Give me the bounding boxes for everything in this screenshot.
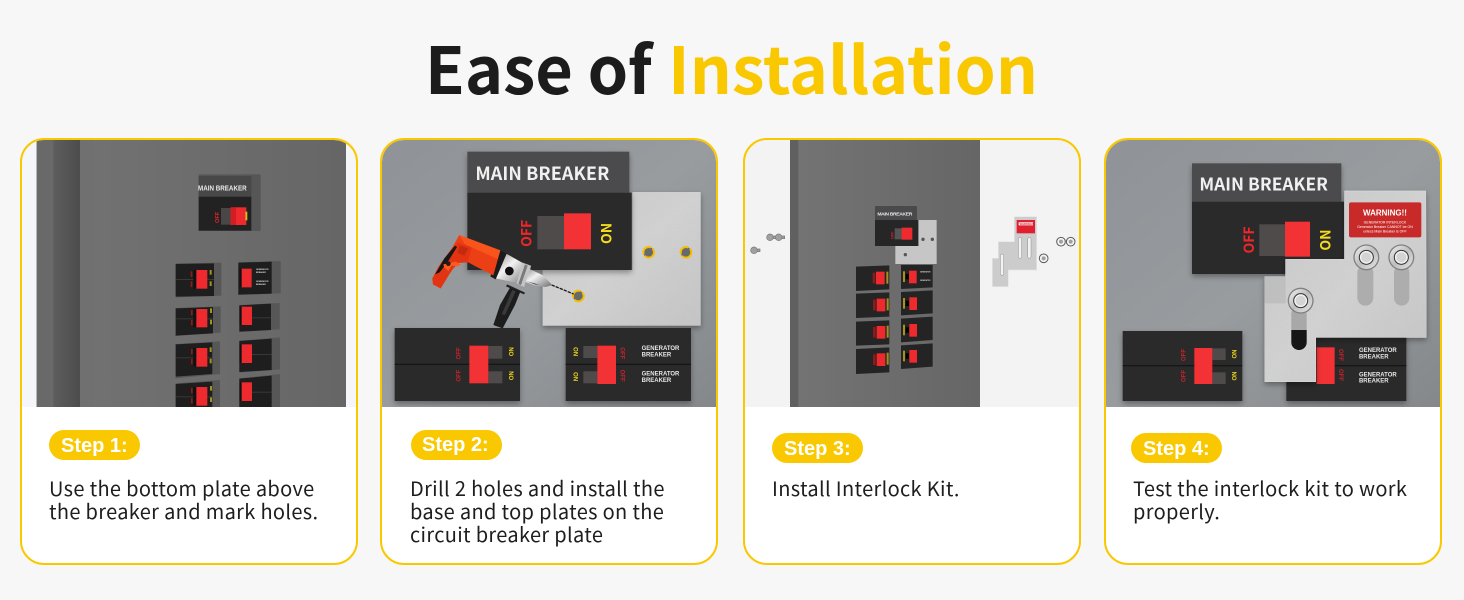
lower left breaker: ON xyxy=(509,371,515,380)
interlock kit plate xyxy=(992,217,1037,287)
step 3 badge: Step 3: xyxy=(784,438,851,460)
warning label xyxy=(1349,202,1421,237)
card outline xyxy=(381,139,717,564)
lower right breaker xyxy=(566,328,691,401)
plate slots xyxy=(1291,265,1409,350)
interlock kit plate: WARNING!! xyxy=(1020,223,1033,226)
card outline xyxy=(1105,139,1441,564)
right breaker column: GENERATOR xyxy=(256,280,269,283)
card outline xyxy=(21,139,357,564)
step 3 badge xyxy=(772,433,863,463)
panel: step 4 xyxy=(1105,139,1441,564)
lower right breaker: GENERATOR xyxy=(1359,348,1397,354)
main breaker window xyxy=(198,174,261,231)
warning label: GENERATOR INTERLOCK xyxy=(1364,221,1407,225)
step 1 text: Use the bottom plate above xyxy=(49,473,315,502)
lower left breaker xyxy=(1123,331,1242,401)
lower left breaker: OFF xyxy=(1182,349,1188,361)
illustration: testing interlock xyxy=(1106,139,1440,407)
main breaker: OFF xyxy=(517,220,537,247)
step 4 badge: Step 4: xyxy=(1143,438,1210,460)
main breaker: ON xyxy=(597,223,617,244)
right breaker column: GENERATOR xyxy=(256,268,269,271)
illustration: breaker panel closed xyxy=(22,139,356,407)
warning label: WARNING!! xyxy=(1363,208,1407,217)
panel: step 1 xyxy=(21,139,357,564)
step 3 text: Install Interlock Kit. xyxy=(772,473,960,502)
title xyxy=(425,19,1038,113)
lower right breaker xyxy=(1286,333,1406,401)
main breaker: MAIN BREAKER xyxy=(475,160,609,186)
lower left breaker xyxy=(395,328,520,401)
step 2 text: base and top plates on the xyxy=(410,496,664,525)
main breaker: MAIN BREAKER xyxy=(877,211,913,217)
base plate xyxy=(543,192,701,326)
main breaker: OFF xyxy=(1239,226,1259,254)
lower right breaker: OFF xyxy=(1337,349,1343,361)
step 2 badge: Step 2: xyxy=(422,434,489,456)
lower right breaker: ON xyxy=(572,372,578,381)
icon: red power drill xyxy=(432,235,574,328)
lower left breaker: ON xyxy=(1233,350,1239,358)
lower right breaker: BREAKER xyxy=(642,378,672,384)
step 4 badge xyxy=(1131,433,1222,463)
icon: right fasteners xyxy=(1039,237,1075,263)
step 4 text: Test the interlock kit to work xyxy=(1133,473,1407,502)
title: Installation xyxy=(668,19,1038,113)
illustration: drilling holes xyxy=(382,139,716,407)
screws xyxy=(1288,244,1414,314)
lower right breaker: OFF xyxy=(1337,369,1343,381)
main breaker: ON xyxy=(1316,229,1336,251)
step 2 text: Drill 2 holes and install the xyxy=(410,473,665,502)
step 1 text: the breaker and mark holes. xyxy=(49,496,318,525)
main breaker window: OFF xyxy=(215,211,221,223)
lower left breaker: OFF xyxy=(457,347,463,359)
breaker columns xyxy=(856,265,933,374)
main breaker xyxy=(1192,163,1344,274)
lower left breaker: OFF xyxy=(457,369,463,382)
lower right breaker: BREAKER xyxy=(1359,379,1389,385)
card outline xyxy=(744,139,1080,564)
breaker columns: GENERATOR xyxy=(920,279,931,282)
interlock plate xyxy=(1265,191,1426,382)
left breaker column xyxy=(176,263,221,407)
main breaker window: MAIN BREAKER xyxy=(198,185,247,192)
main breaker: OFF xyxy=(890,231,894,239)
right breaker column: BREAKER xyxy=(256,283,266,286)
lower right breaker: OFF xyxy=(618,347,624,360)
lower left breaker: OFF xyxy=(1182,370,1188,382)
plate on panel xyxy=(895,220,937,264)
step 4 text: properly. xyxy=(1133,496,1220,525)
icon: left screws xyxy=(751,234,785,254)
step 1 badge: Step 1: xyxy=(61,435,128,457)
breaker panel xyxy=(790,139,980,407)
main breaker: MAIN BREAKER xyxy=(1199,171,1328,196)
right breaker column xyxy=(238,261,281,407)
lower right breaker: GENERATOR xyxy=(1359,372,1397,378)
lower right breaker: GENERATOR xyxy=(642,372,680,378)
lower left breaker: ON xyxy=(509,347,515,356)
title: Ease of xyxy=(425,19,655,113)
breaker columns: GENERATOR xyxy=(920,271,931,274)
step 2 text: circuit breaker plate xyxy=(410,519,603,548)
lower left breaker: ON xyxy=(1233,372,1239,380)
right breaker column: BREAKER xyxy=(256,271,266,274)
lower right breaker: GENERATOR xyxy=(642,346,680,352)
lower right breaker: BREAKER xyxy=(642,353,672,359)
main breaker xyxy=(467,152,632,270)
step 1 badge xyxy=(49,430,140,460)
lower right breaker: BREAKER xyxy=(1359,354,1389,360)
illustration: installing interlock kit xyxy=(745,139,1079,407)
step 2 badge xyxy=(411,430,502,460)
lower right breaker: ON xyxy=(572,347,578,356)
main breaker xyxy=(875,206,918,246)
panel: step 2 xyxy=(381,139,717,564)
warning label: Generator Breaker CANNOT be ON xyxy=(1357,225,1413,229)
panel: step 3 xyxy=(744,139,1080,564)
lower right breaker: OFF xyxy=(618,370,624,382)
warning label: unless Main Breaker is OFF xyxy=(1363,229,1407,233)
